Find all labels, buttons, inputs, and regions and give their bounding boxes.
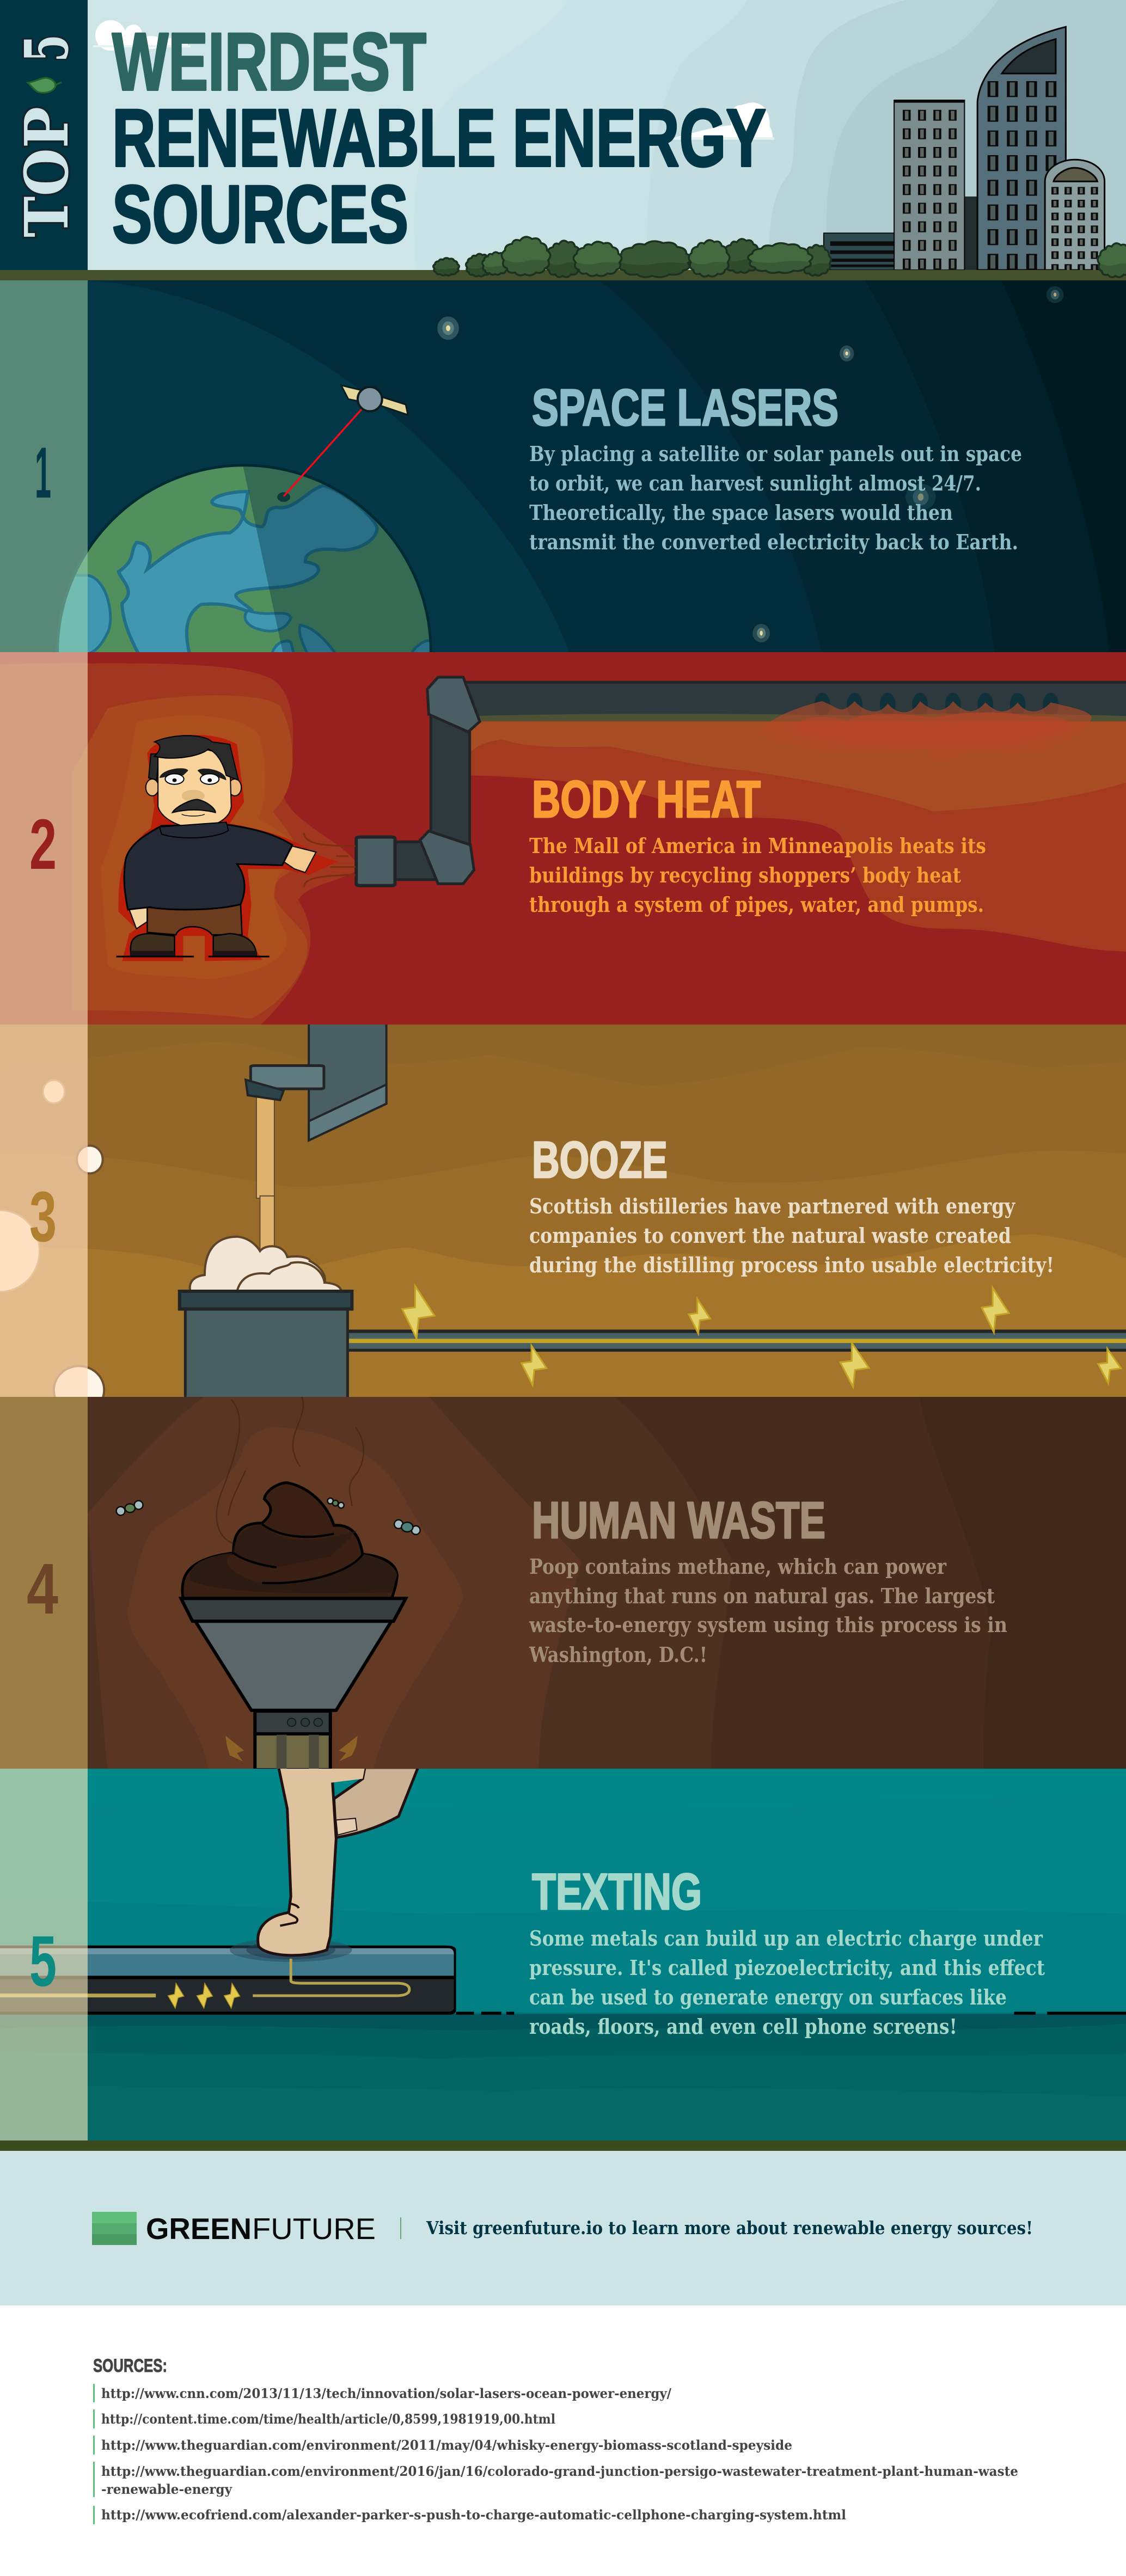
panel: call to action <box>0 2151 1126 2305</box>
trees <box>433 237 1126 277</box>
sources heading: SOURCES: <box>93 2356 167 2376</box>
logo wordmark: GREEN <box>146 2212 252 2246</box>
logo mark <box>92 2212 137 2245</box>
body text: body heat: The Mall of America in Minneapolis heats its <box>529 833 986 858</box>
source 4: -renewable-energy <box>101 2481 232 2497</box>
body text: space lasers: By placing a satellite or solar panels out in space <box>529 441 1022 466</box>
body text: texting <box>529 1926 1045 2039</box>
number 2: 2 <box>29 804 57 884</box>
panel: sources <box>93 2356 1018 2524</box>
body text: human waste: Poop contains methane, which can power <box>529 1554 947 1579</box>
finger <box>258 1768 418 1955</box>
body text: human waste <box>529 1554 1007 1667</box>
body text: human waste: Washington, D.C.! <box>529 1642 707 1667</box>
ground line <box>456 2011 1126 2015</box>
poop pile <box>182 1483 397 1599</box>
bubbles <box>0 1080 104 1414</box>
body text: texting: pressure. It's called piezoelectricity, and this effect <box>529 1955 1045 1980</box>
vertical label TOP: TOP <box>11 107 82 237</box>
body text: texting: Some metals can build up an electric charge under <box>529 1926 1043 1951</box>
stars <box>437 286 1063 642</box>
chimney and spout <box>246 1023 387 1251</box>
panel: header <box>0 0 1126 280</box>
cloud: behind energy <box>671 102 774 140</box>
source 5: http://www.ecofriend.com/alexander-parker-s-push-to-charge-automatic-cellphone-charging-system.html <box>101 2507 846 2523</box>
panel: body heat <box>0 651 1126 1027</box>
divider <box>400 2217 401 2239</box>
source 4 <box>93 2462 1018 2497</box>
tank <box>180 1291 352 1400</box>
teal background bands <box>0 1764 1126 2141</box>
body text: booze: companies to convert the natural waste created <box>529 1223 1011 1248</box>
source 2: http://content.time.com/time/health/article/0,8599,1981919,00.html <box>101 2411 555 2427</box>
body text: space lasers: transmit the converted electricity back to Earth. <box>529 530 1018 554</box>
logo wordmark: FUTURE <box>252 2212 376 2246</box>
header sky bands <box>0 0 1126 271</box>
dim bolts <box>225 1735 358 1762</box>
body text: body heat: through a system of pipes, water, and pumps. <box>529 892 984 917</box>
brown background bands <box>0 1394 1126 1770</box>
funnel <box>181 1598 406 1770</box>
space background bands <box>0 278 1126 657</box>
body text: booze: Scottish distilleries have partnered with energy <box>529 1194 1015 1218</box>
amber background bands <box>0 1023 1126 1400</box>
title: WEIRDEST <box>112 16 426 107</box>
heading: texting: TEXTING <box>532 1863 702 1920</box>
heading: body heat: BODY HEAT <box>532 770 761 829</box>
title <box>112 16 766 260</box>
satellite and laser beam <box>277 385 408 502</box>
ground strip <box>0 270 1126 280</box>
body text: space lasers: to orbit, we can harvest sunlight almost 24/7. <box>529 471 981 495</box>
panel: space lasers: 1 <box>35 433 51 513</box>
man radiating heat <box>117 735 356 961</box>
vertical label 5: 5 <box>11 34 82 62</box>
body text: body heat <box>529 833 986 917</box>
number 4: 4 <box>27 1549 58 1629</box>
panel: human waste <box>0 1394 1126 1770</box>
source 1: http://www.cnn.com/2013/11/13/tech/innovation/solar-lasers-ocean-power-energy/ <box>101 2385 671 2401</box>
title: SOURCES <box>112 168 408 260</box>
source 3: http://www.theguardian.com/environment/2011/may/04/whisky-energy-biomass-scotland-speyside <box>101 2437 792 2453</box>
logo wordmark <box>146 2212 376 2246</box>
number 3: 3 <box>29 1176 57 1256</box>
heading: booze: BOOZE <box>532 1131 668 1189</box>
body text: human waste: waste-to-energy system using this process is in <box>529 1612 1007 1637</box>
city buildings <box>824 27 1105 270</box>
lightning bolts <box>402 1286 1121 1387</box>
source 4: http://www.theguardian.com/environment/2016/jan/16/colorado-grand-junction-persigo-wastewater-treatment-plant-human-waste <box>101 2463 1018 2479</box>
cloud: behind weirdest <box>93 20 191 51</box>
body text: body heat: buildings by recycling shoppers’ body heat <box>529 863 961 887</box>
title: RENEWABLE ENERGY <box>112 92 766 183</box>
number 5: 5 <box>29 1921 57 2001</box>
rank strip <box>0 652 88 1025</box>
phone / piezo device <box>0 1938 456 2015</box>
heading: space lasers: SPACE LASERS <box>532 379 839 437</box>
rank strip <box>0 1769 88 2140</box>
heat background <box>0 651 1126 1027</box>
left strip <box>0 0 88 270</box>
vertical pipe and joints <box>356 677 480 886</box>
rank strip <box>0 1025 88 1397</box>
body text: space lasers: Theoretically, the space lasers would then <box>529 500 953 525</box>
icon: leaf <box>28 78 62 93</box>
body text: human waste: anything that runs on natural gas. The largest <box>529 1584 995 1608</box>
panel: texting <box>0 1764 1126 2141</box>
rank strip <box>0 280 88 652</box>
body text: texting: roads, floors, and even cell phone screens! <box>529 2014 957 2039</box>
panel: space lasers <box>0 280 1126 652</box>
body text: texting: can be used to generate energy on surfaces like <box>529 1985 1007 2009</box>
planet earth <box>59 464 432 652</box>
power line <box>347 1329 1126 1352</box>
radiator pipe <box>466 680 1126 748</box>
steam lines <box>217 1396 364 1543</box>
body text: booze <box>529 1194 1054 1277</box>
call to action text: Visit greenfuture.io to learn more about renewable energy sources! <box>426 2217 1033 2238</box>
foam <box>190 1237 341 1291</box>
footer ground strip <box>0 2140 1126 2151</box>
panel: booze <box>0 1023 1126 1414</box>
rank strip <box>0 1397 88 1769</box>
flies <box>117 1498 420 1535</box>
body text: booze: during the distilling process into usable electricity! <box>529 1253 1054 1277</box>
body text: space lasers <box>529 441 1022 554</box>
heading: human waste: HUMAN WASTE <box>532 1492 825 1549</box>
